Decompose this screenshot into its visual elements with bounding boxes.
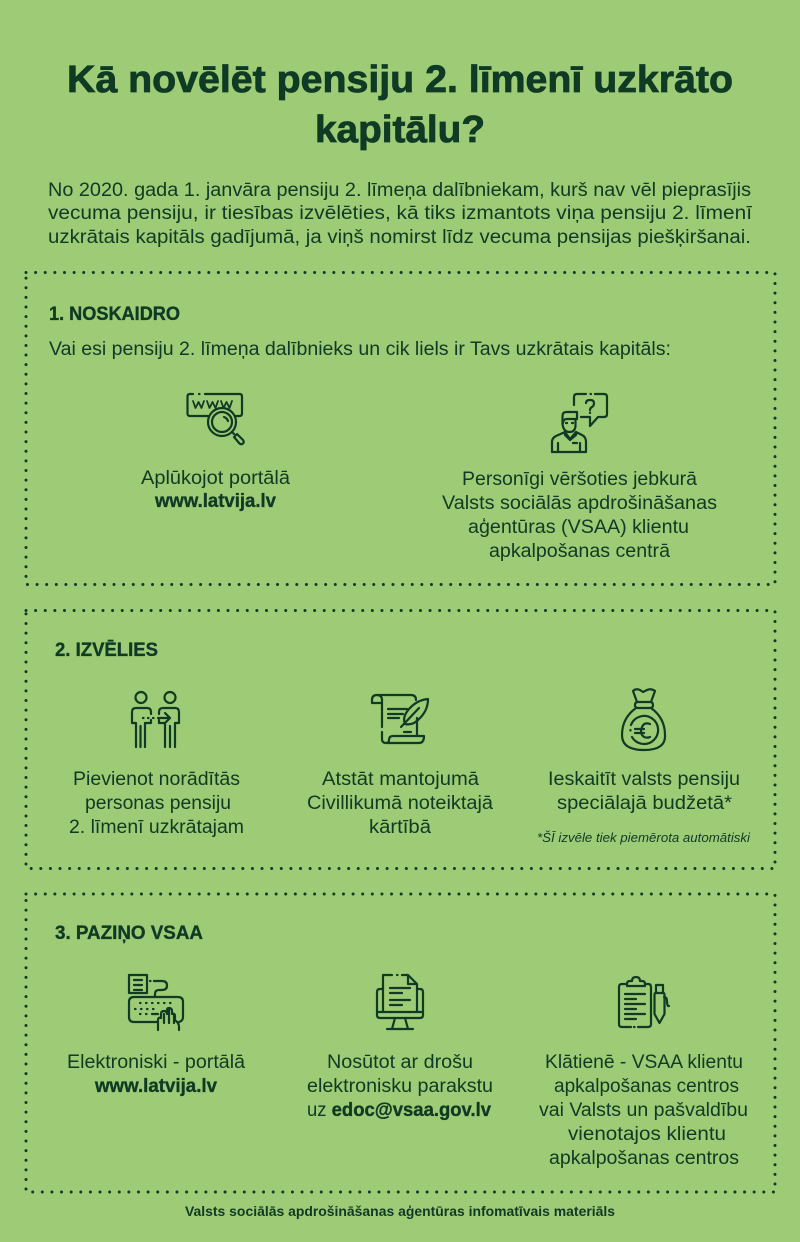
title: Kā novēlēt pensiju 2. līmenī uzkrāto: [67, 59, 733, 101]
icon: scroll with quill: [372, 695, 428, 743]
text: in person: [539, 1052, 748, 1169]
text: visit in person: aģentūras (VSAA) klientu: [468, 517, 689, 538]
intro text: vecuma pensiju, ir tiesības izvēlēties, kā tiks izmantots viņa pensiju 2. līmenī: [48, 203, 753, 224]
text: visit in person: [442, 469, 717, 562]
icon: www search: [188, 394, 244, 444]
footnote: *ŠĪ izvēle tiek piemērota automātiski: [537, 830, 751, 845]
footer: Valsts sociālās apdrošināšanas aģentūras infomatīvais materiāls: [185, 1203, 615, 1219]
text: signed email: Nosūtot ar drošu: [327, 1052, 473, 1073]
text: pension budget: speciālajā budžetā*: [557, 793, 733, 814]
heading: 3. paziņo vsaa: 3. PAZIŅO VSAA: [55, 923, 203, 944]
title: kapitālu?: [315, 109, 485, 151]
text: pension budget: Ieskaitīt valsts pensiju: [548, 769, 740, 790]
icon: document on monitor: [377, 975, 423, 1029]
text: visit in person: apkalpošanas centrā: [489, 541, 670, 562]
text: in person: vai Valsts un pašvaldību: [539, 1100, 748, 1121]
icon: keyboard with hand: [129, 975, 183, 1030]
panel: 1. noskaidro: [26, 272, 775, 584]
intro text: [48, 180, 753, 248]
text: in person: vienotajos klientu: [568, 1124, 726, 1145]
text: signed email: elektronisku parakstu: [307, 1076, 493, 1097]
text: portal: www.latvija.lv: [154, 491, 276, 512]
text: inheritance: kārtībā: [369, 817, 431, 838]
lead text: Vai esi pensiju 2. līmeņa dalībnieks un cik liels ir Tavs uzkrātais kapitāls:: [49, 339, 671, 360]
heading: 1. noskaidro: 1. NOSKAIDRO: [49, 304, 180, 325]
text: visit in person: Valsts sociālās apdrošināšanas: [442, 493, 717, 514]
text: in person: apkalpošanas centros: [554, 1076, 739, 1097]
heading: 2. izvēlies: 2. IZVĒLIES: [55, 640, 158, 661]
text: pension budget: [548, 769, 740, 814]
text: add persons: personas pensiju: [85, 793, 231, 814]
icon: money bag with euro: [622, 689, 665, 750]
text: electronically: [67, 1052, 245, 1097]
panel: 3. paziņo vsaa: [26, 894, 775, 1192]
text: signed email: [307, 1052, 493, 1121]
icon: two people with arrow: [132, 692, 179, 747]
title: [67, 59, 733, 151]
icon: person with question: [552, 394, 607, 452]
intro text: No 2020. gada 1. janvāra pensiju 2. līmeņa dalībniekam, kurš nav vēl pieprasījis: [48, 180, 751, 201]
intro text: uzkrātais kapitāls gadījumā, ja viņš nomirst līdz vecuma pensijas piešķiršanai.: [48, 227, 751, 248]
text: inheritance: [307, 769, 493, 838]
text: add persons: Pievienot norādītās: [73, 769, 240, 790]
text: add persons: [69, 769, 244, 838]
text: portal: Aplūkojot portālā: [141, 468, 290, 489]
text: signed email: uz edoc@vsaa.gov.lv: [307, 1100, 491, 1121]
text: electronically: Elektroniski - portālā: [67, 1052, 245, 1073]
text: in person: apkalpošanas centros: [549, 1148, 739, 1169]
text: inheritance: Civillikumā noteiktajā: [307, 793, 493, 814]
text: electronically: www.latvija.lv: [94, 1076, 217, 1097]
text: inheritance: Atstāt mantojumā: [322, 769, 479, 790]
text: visit in person: Personīgi vēršoties jebkurā: [462, 469, 697, 490]
text: in person: Klātienē - VSAA klientu: [545, 1052, 743, 1073]
text: portal: [141, 468, 290, 512]
panel: 2. izvēlies: [26, 610, 775, 868]
text: add persons: 2. līmenī uzkrātajam: [69, 817, 244, 838]
icon: clipboard and pen: [619, 977, 669, 1027]
